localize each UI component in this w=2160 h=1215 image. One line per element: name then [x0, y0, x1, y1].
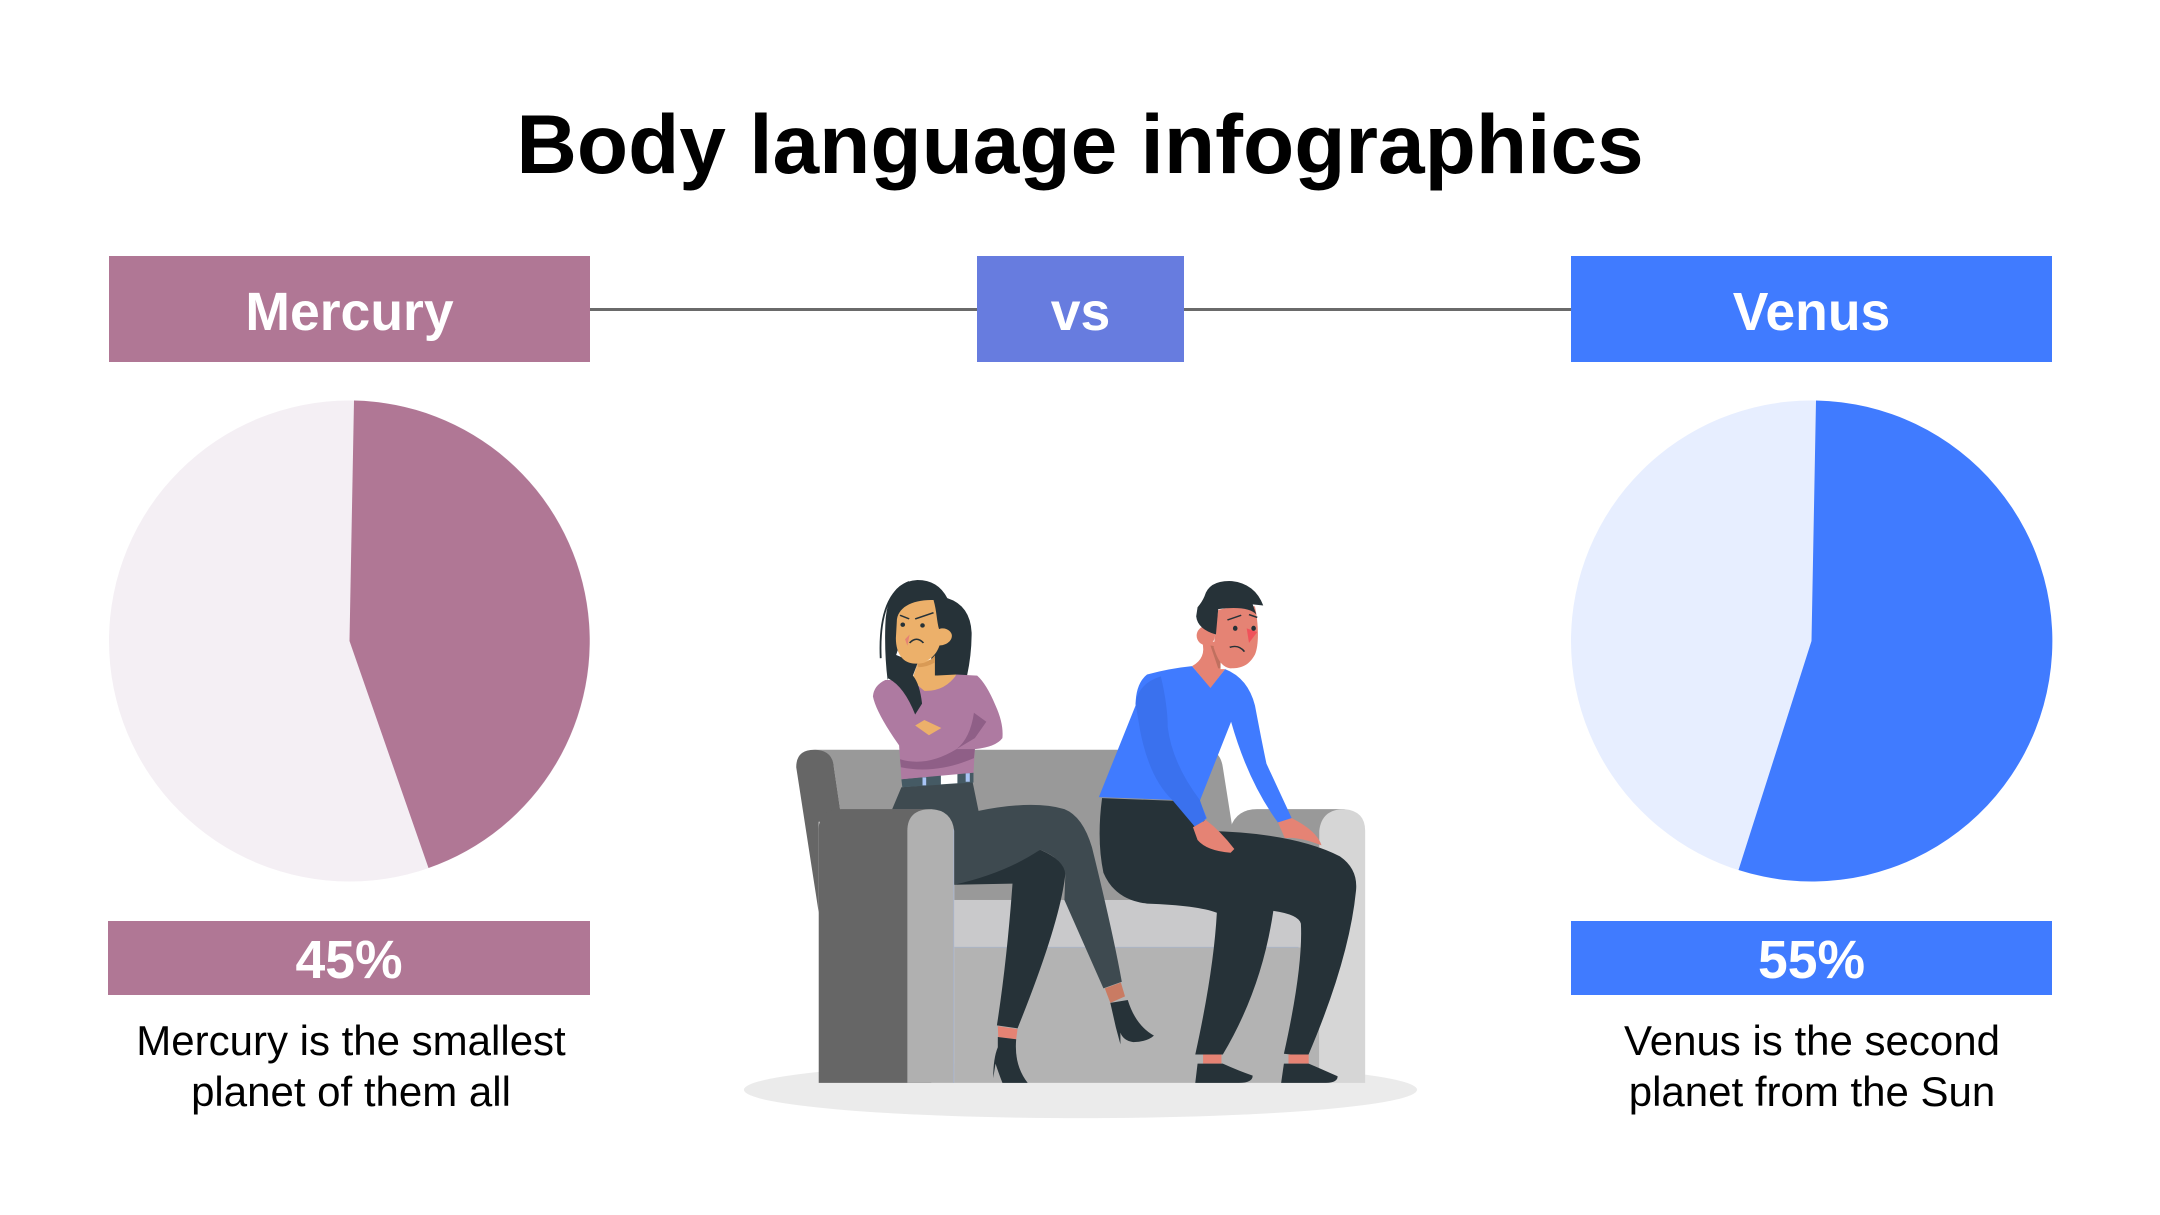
description: Venus: planet from the Sun — [1629, 1068, 1995, 1114]
neck — [1192, 642, 1225, 688]
description: Mercury — [136, 1017, 566, 1114]
header: vs — [977, 256, 1184, 362]
ear — [1197, 626, 1215, 645]
value bar: Mercury 45%: 45% — [295, 931, 403, 990]
title: Body language infographics — [516, 97, 1644, 191]
face — [896, 600, 952, 664]
description: Venus: Venus is the second — [1624, 1017, 2000, 1064]
header: vs: vs — [1051, 283, 1110, 342]
value bar: Venus 55%: 55% — [1758, 931, 1865, 990]
sweater — [1099, 666, 1292, 827]
neck and hand — [913, 658, 956, 691]
shoes — [1110, 1000, 1154, 1044]
value bar: Mercury 45% — [108, 921, 590, 995]
connector line: Mercury to vs — [590, 308, 977, 311]
pie chart: Mercury 45% — [109, 400, 590, 882]
sweater — [873, 675, 1003, 779]
man — [1099, 581, 1356, 1083]
description: Mercury: Mercury is the smallest — [136, 1017, 566, 1064]
hands — [1193, 820, 1234, 853]
connector line: vs to Venus — [1183, 308, 1571, 311]
trousers — [1100, 798, 1356, 1056]
header: Venus: Venus — [1733, 283, 1890, 342]
ankles — [1105, 983, 1125, 1003]
shoes — [1195, 1064, 1253, 1083]
description: Mercury: planet of them all — [191, 1068, 511, 1114]
ankles — [1203, 1054, 1309, 1064]
woman — [873, 580, 1154, 1083]
hair — [1196, 581, 1263, 635]
front hair lock — [886, 651, 922, 715]
header: Mercury — [109, 256, 590, 362]
value bar: Venus 55% — [1571, 921, 2052, 995]
ground shadow — [744, 1061, 1417, 1118]
header: Mercury: Mercury — [245, 283, 454, 342]
description: Venus — [1624, 1017, 2000, 1114]
crossed leg — [892, 782, 1122, 988]
belt — [901, 772, 973, 787]
pie chart: Venus 55% — [1571, 400, 2052, 882]
sofa — [796, 750, 1365, 1083]
hair — [885, 580, 972, 680]
face — [1214, 605, 1258, 668]
illustration: couple on sofa — [744, 580, 1417, 1118]
header: Venus — [1571, 256, 2052, 362]
back leg — [954, 850, 1065, 1028]
